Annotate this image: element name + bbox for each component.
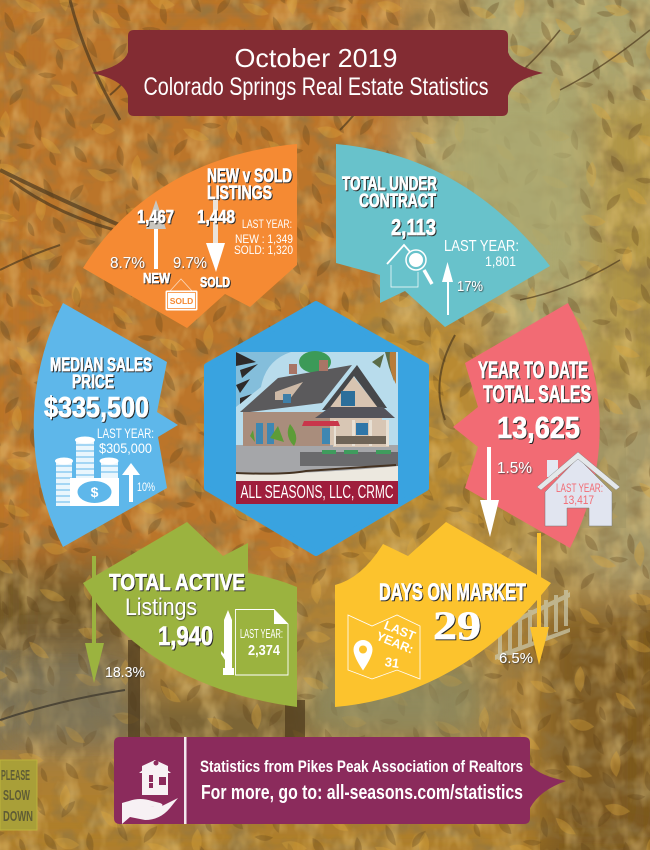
title text: October 2019 [234, 43, 398, 73]
heading: total under contract [342, 174, 437, 212]
arrow up: new [146, 200, 166, 269]
total under contract value: 2,113 [391, 214, 436, 240]
arrow up [122, 463, 140, 502]
sold percent change: 9.7% [173, 255, 207, 272]
percent change: 1.5% [497, 460, 532, 477]
icon: sold sign [166, 279, 198, 310]
panel: center hexagon [207, 304, 426, 553]
arrow down: total active [85, 556, 104, 683]
last year text: 1,801 [485, 253, 516, 269]
icon: house last year [537, 452, 620, 526]
last year text: 13,417 [563, 493, 594, 507]
panel: median sales price [34, 303, 178, 547]
heading: new v sold listings [207, 166, 292, 204]
heading: total active: TOTAL ACTIVE [109, 569, 245, 595]
arrow up [442, 262, 453, 315]
last year text: LAST YEAR: [242, 217, 292, 231]
new percent change: 8.7% [110, 255, 145, 272]
heading: listings: Listings [125, 594, 197, 621]
last year text: NEW : 1,349 [235, 232, 293, 246]
walls [243, 412, 330, 446]
last year value: 31 [384, 654, 400, 671]
title banner [92, 30, 543, 116]
percent change: 10% [137, 480, 155, 494]
heading: median sales price [50, 355, 152, 393]
sign: please slow down [0, 760, 37, 830]
last year text: LAST YEAR: [556, 481, 603, 495]
last year text [444, 238, 519, 269]
last year text: YEAR: [374, 629, 416, 657]
fence [495, 590, 570, 660]
icon: coins and cash [55, 436, 119, 506]
ground [236, 445, 398, 481]
icon: house with magnifier [387, 245, 432, 287]
sign: please slow down: PLEASE [1, 767, 30, 784]
year to date value: 13,625 [497, 410, 580, 445]
last year text: SOLD: 1,320 [234, 243, 293, 257]
subtitle text: Colorado Springs Real Estate Statistics [144, 73, 488, 101]
heading: median sales price: MEDIAN SALES [50, 355, 152, 376]
sign: please slow down: DOWN [3, 808, 33, 825]
source text: Statistics from Pikes Peak Association of Realtors [200, 757, 523, 776]
icon: coins and cash: $ [91, 484, 99, 500]
heading: new v sold listings: LISTINGS [207, 183, 272, 204]
icon: map with pin [348, 615, 420, 679]
icon: house in hand [122, 760, 178, 824]
link text: For more, go to: all-seasons.com/statistics [201, 782, 523, 804]
days on market value: 29 [433, 603, 481, 648]
heading: days on market: DAYS ON MARKET [379, 579, 526, 606]
arrow down: sold [206, 200, 225, 272]
source banner [114, 737, 566, 824]
arrow down: year to date [480, 447, 499, 537]
name plate: ALL SEASONS, LLC, CRMC [240, 482, 394, 502]
sold listings value: 1,448 [197, 207, 235, 227]
icon: sold sign: SOLD [170, 296, 193, 306]
panel: total under contract [336, 144, 550, 327]
label: sold: SOLD [200, 274, 230, 291]
percent change: days on market: 6.5% [499, 650, 533, 667]
panel: days on market [335, 522, 551, 707]
last year text: LAST [382, 618, 418, 643]
last year text [97, 425, 154, 456]
heading: median sales price: PRICE [72, 372, 114, 393]
new listings value: 1,467 [137, 207, 174, 227]
last year value: 2,374 [248, 642, 281, 659]
sign: please slow down: SLOW [3, 787, 31, 804]
percent change: 17% [457, 278, 483, 295]
panel: total active listings [83, 522, 297, 707]
heading: year to date total sales: TOTAL SALES [483, 381, 591, 408]
heading: new v sold listings: NEW v SOLD [207, 166, 292, 187]
median sales price value: $335,500 [44, 392, 149, 424]
name plate [236, 481, 398, 504]
roof [240, 365, 352, 412]
heading: total under contract: CONTRACT [359, 191, 436, 212]
last year text: LAST YEAR: [444, 238, 519, 255]
percent change: total active: 18.3% [105, 664, 145, 681]
last year text: LAST YEAR: [97, 425, 154, 441]
porch [333, 420, 389, 447]
last year text [556, 481, 603, 507]
icon: pen and document [221, 610, 288, 675]
last year text [234, 217, 293, 257]
heading: year to date total sales [478, 357, 591, 408]
last year text: LAST YEAR: [240, 626, 283, 641]
panel: year to date total sales [453, 303, 620, 548]
total active value: 1,940 [158, 621, 213, 651]
arrow down: days on market [530, 533, 549, 665]
last year text [374, 617, 420, 657]
panel: new v sold listings [83, 144, 297, 328]
last year text: $305,000 [99, 440, 152, 456]
house illustration [236, 351, 398, 504]
label: new: NEW [143, 270, 171, 287]
heading: year to date total sales: YEAR TO DATE [478, 357, 588, 384]
divider [184, 737, 186, 824]
heading: total under contract: TOTAL UNDER [342, 174, 437, 195]
